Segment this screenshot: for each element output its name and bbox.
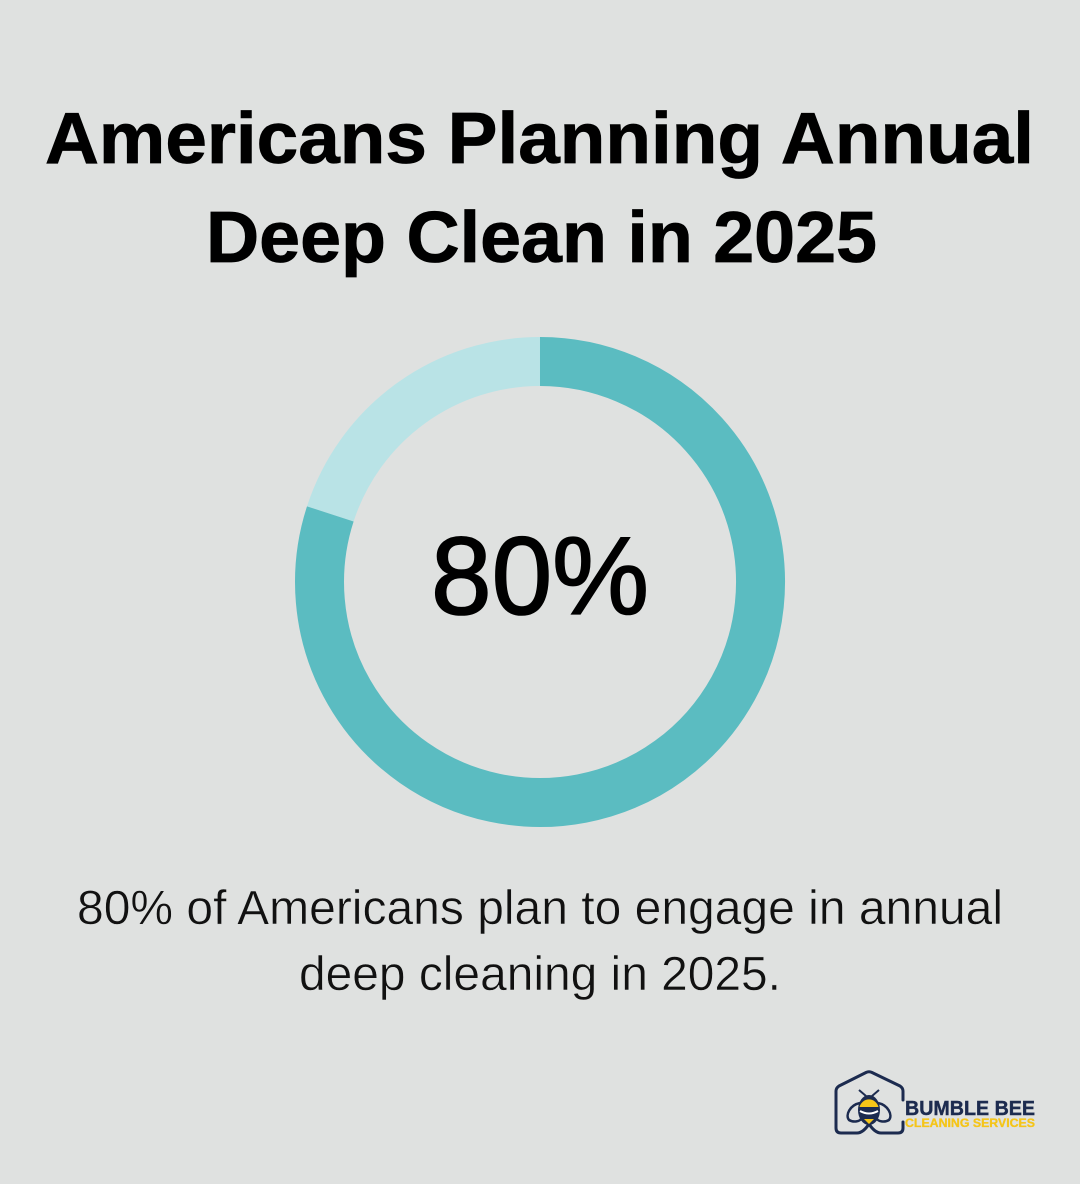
ring segment: remaining 20% [330,362,540,514]
description text [77,882,1003,1001]
donut centre value: 80% [431,515,649,638]
title: Deep Clean in 2025 [206,198,877,278]
description text: 80% of Americans plan to engage in annual [77,882,1003,935]
icon: house outline with bee [836,1072,903,1133]
logo tagline: CLEANING SERVICES [905,1118,1035,1130]
logo wordmark: BUMBLE BEE [905,1098,1035,1120]
logo: Bumble Bee Cleaning Services [836,1072,1035,1133]
title: Americans Planning Annual [45,99,1034,179]
description text: deep cleaning in 2025. [299,948,781,1001]
donut chart: 80% [320,362,761,802]
title [45,99,1034,278]
ring segment: 80% [320,362,761,802]
